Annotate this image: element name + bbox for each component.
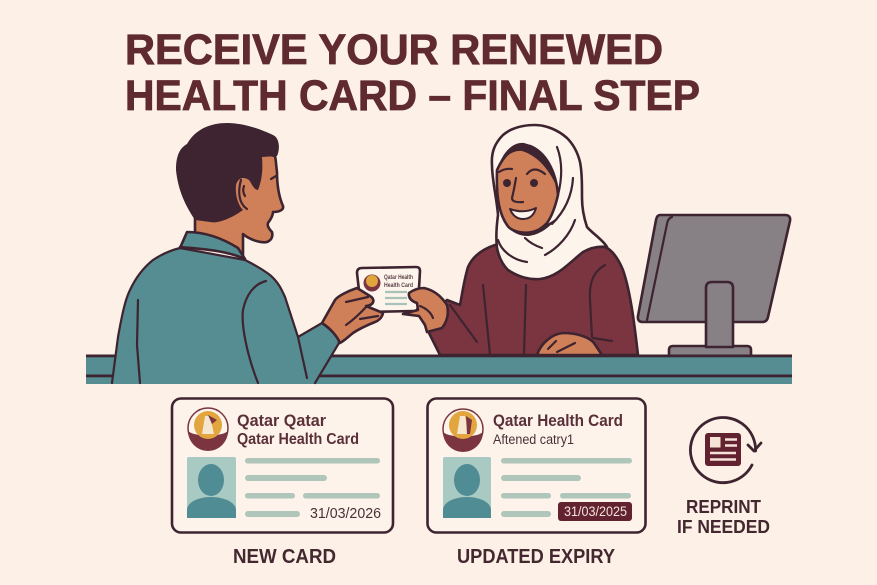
emblem bbox=[188, 408, 228, 451]
detail lines bbox=[245, 458, 380, 517]
card in hand: Qatar Health bbox=[384, 274, 413, 281]
card: new card: 31/03/2026 bbox=[310, 506, 381, 522]
man face and neck bbox=[195, 150, 283, 255]
caption: updated expiry: UPDATED EXPIRY bbox=[457, 546, 616, 568]
man bbox=[112, 123, 339, 383]
card: new card bbox=[172, 398, 393, 532]
card: updated expiry: Aftened catry1 bbox=[493, 432, 574, 447]
photo placeholder bbox=[187, 457, 236, 518]
title bbox=[125, 26, 700, 120]
emblem bbox=[443, 409, 483, 452]
photo placeholder bbox=[443, 457, 491, 518]
small logo bbox=[364, 274, 380, 292]
headscarf bbox=[492, 125, 607, 279]
card: updated expiry: Qatar Health Card bbox=[493, 411, 623, 430]
card: new card: Qatar Health Card bbox=[237, 431, 359, 448]
card in hand: Health Card bbox=[384, 282, 413, 289]
man shirt bbox=[112, 248, 339, 383]
man hand bbox=[322, 288, 383, 343]
highlighted expiry date: 31/03/2025 bbox=[564, 504, 627, 519]
icon: reprint bbox=[690, 417, 761, 483]
monitor bbox=[638, 215, 790, 357]
card: new card: Qatar Qatar bbox=[237, 412, 327, 430]
reprint label: IF NEEDED bbox=[677, 516, 770, 537]
woman bbox=[425, 125, 638, 355]
counter bbox=[86, 354, 792, 384]
reprint label: REPRINT bbox=[686, 496, 762, 517]
woman face bbox=[497, 145, 558, 233]
woman lower hand bbox=[537, 333, 602, 355]
title: RECEIVE YOUR RENEWED bbox=[125, 26, 663, 74]
detail lines bbox=[501, 458, 632, 517]
man hair bbox=[176, 123, 279, 222]
caption: new card: NEW CARD bbox=[233, 546, 336, 568]
reprint label bbox=[677, 496, 770, 537]
woman body bbox=[425, 245, 638, 355]
handover: hands and card bbox=[322, 267, 448, 343]
woman hand bbox=[403, 288, 448, 332]
title: HEALTH CARD – FINAL STEP bbox=[125, 72, 700, 120]
card: updated expiry bbox=[428, 398, 646, 532]
card in hand bbox=[357, 267, 420, 312]
